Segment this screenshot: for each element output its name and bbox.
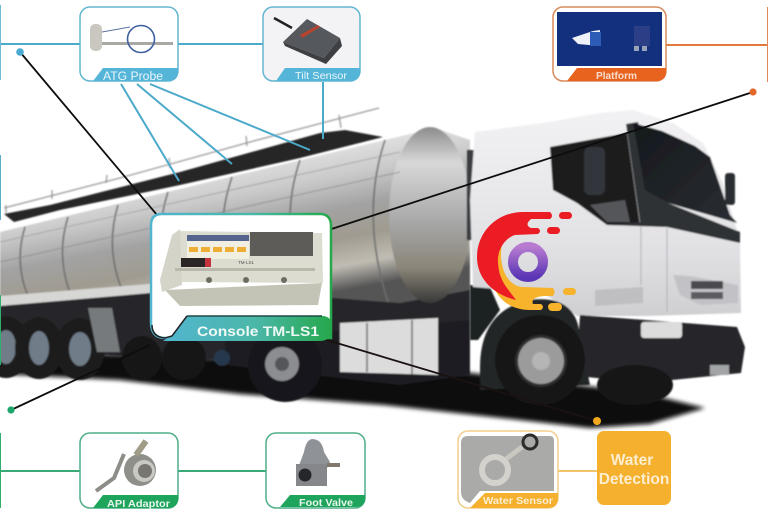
pointer dots: [7, 48, 757, 425]
black pointer lines: [11, 52, 753, 421]
icon: tilt sensor: [274, 18, 342, 64]
panel: water detection: Detection: [599, 471, 669, 488]
bumper: [578, 315, 745, 383]
panel: water detection: Water: [611, 452, 653, 469]
yellow connector: [558, 470, 597, 472]
trailer wheels: [0, 316, 206, 380]
left edge panel fragments: [0, 5, 1, 508]
panel: water sensor: [458, 431, 558, 508]
brand logo: [477, 212, 576, 311]
water sensor photo: [461, 435, 554, 503]
tanker trailer: [0, 108, 471, 402]
front wheel: [495, 315, 585, 405]
panel: water detection: [597, 431, 671, 505]
cab body: [470, 110, 741, 316]
logo yellow arc: [491, 240, 576, 311]
wheel arch: [480, 299, 590, 390]
ground shadow: [0, 350, 705, 428]
blue connectors: [0, 44, 323, 181]
tractor fuel tank and frame: [225, 320, 470, 385]
label: platform: Platform: [596, 70, 637, 82]
label: foot valve: Foot Valve: [299, 497, 353, 509]
console frame: [151, 214, 331, 338]
front far wheel: [597, 365, 673, 405]
truck cab: [467, 110, 745, 405]
icon: probe: [90, 24, 173, 52]
green connector: [0, 470, 266, 472]
windscreen: [633, 123, 737, 223]
platform screenshot: [557, 12, 662, 66]
side mirror: [584, 147, 605, 195]
panel: ATG probe: [80, 7, 178, 83]
orange connector: [666, 44, 768, 46]
label: tilt sensor: Tilt Sensor: [295, 70, 348, 82]
cab grille: [673, 275, 738, 305]
cab door line: [641, 226, 667, 312]
logo red arc: [477, 212, 572, 300]
tank end dome: [389, 127, 471, 303]
logo purple ring: [513, 247, 543, 277]
trailer chassis: [0, 280, 470, 362]
panel: platform: [553, 7, 666, 82]
panel: API adaptor: [80, 433, 178, 510]
icon: foot valve: [296, 439, 340, 486]
console device: [160, 229, 323, 306]
windscreen pillar and band: [607, 122, 740, 243]
tractor rear wheel: [248, 328, 322, 402]
cab side window: [550, 133, 640, 225]
console label: Console TM-LS1: [197, 323, 319, 339]
tank ribs: [0, 140, 400, 302]
label: API adaptor: API Adaptor: [107, 498, 170, 510]
catwalk railing: [4, 108, 379, 213]
tank lower rail: [0, 284, 150, 306]
label: ATG Probe: ATG Probe: [103, 71, 163, 83]
icon: API adaptor: [96, 441, 156, 491]
catwalk: [4, 130, 383, 222]
right edge panel fragment: [767, 7, 768, 82]
cab rear fairing: [467, 150, 476, 240]
tank body: [0, 128, 470, 303]
panel: tilt sensor: [263, 7, 360, 82]
panel: foot valve: [266, 433, 365, 509]
console device: TM-LS1: [238, 260, 254, 265]
console label: [152, 316, 332, 341]
label: water sensor: Water Sensor: [483, 495, 553, 507]
panel: console TM-LS1: [151, 214, 332, 341]
